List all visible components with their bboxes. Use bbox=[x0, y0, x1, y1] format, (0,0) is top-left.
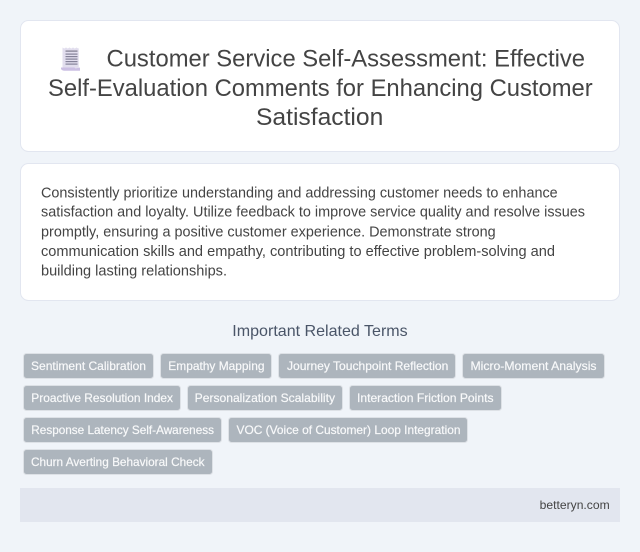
summary text: satisfaction and loyalty. Utilize feedback to improve service quality and resolve issues bbox=[41, 205, 585, 221]
icon: receipt scroll bbox=[61, 48, 80, 71]
tag: Response Latency Self-Awareness: Response Latency Self-Awareness bbox=[31, 423, 214, 437]
tag: Empathy Mapping bbox=[160, 354, 272, 378]
summary text bbox=[41, 185, 585, 279]
tag: Response Latency Self-Awareness bbox=[24, 418, 222, 442]
tag: Micro-Moment Analysis: Micro-Moment Analysis bbox=[470, 359, 596, 373]
tag: Micro-Moment Analysis bbox=[462, 354, 604, 378]
heading: related terms: Important Related Terms bbox=[232, 323, 408, 340]
summary text: communication skills and empathy, contributing to effective problem-solving and bbox=[41, 244, 555, 260]
tag: Proactive Resolution Index: Proactive Resolution Index bbox=[31, 391, 173, 405]
footer bbox=[20, 488, 620, 522]
tag: Churn Averting Behavioral Check bbox=[24, 450, 212, 474]
tag: Empathy Mapping: Empathy Mapping bbox=[168, 359, 264, 373]
title bbox=[48, 46, 593, 131]
tag: Sentiment Calibration bbox=[24, 354, 154, 378]
summary text: promptly, ensuring a positive customer experience. Demonstrate strong bbox=[41, 224, 496, 240]
tag: Proactive Resolution Index bbox=[24, 386, 180, 410]
tag: Journey Touchpoint Reflection bbox=[278, 354, 456, 378]
footer source text: betteryn.com bbox=[540, 498, 610, 512]
tag: VOC (Voice of Customer) Loop Integration: VOC (Voice of Customer) Loop Integration bbox=[236, 423, 460, 437]
summary text: Consistently prioritize understanding and addressing customer needs to enhance bbox=[41, 185, 558, 201]
title: Customer Service Self-Assessment: Effective bbox=[106, 46, 585, 72]
tag: Interaction Friction Points bbox=[350, 386, 502, 410]
tag: Churn Averting Behavioral Check: Churn Averting Behavioral Check bbox=[31, 455, 205, 469]
tag: Sentiment Calibration: Sentiment Calibration bbox=[31, 359, 146, 373]
tag: Interaction Friction Points: Interaction Friction Points bbox=[357, 391, 494, 405]
title: Satisfaction bbox=[256, 104, 383, 131]
tag: VOC (Voice of Customer) Loop Integration bbox=[228, 418, 468, 442]
tag: Personalization Scalability bbox=[188, 386, 342, 410]
panel: summary card bbox=[20, 164, 620, 300]
tag list bbox=[24, 354, 604, 474]
summary text: building lasting relationships. bbox=[41, 263, 227, 279]
tag: Personalization Scalability: Personalization Scalability bbox=[195, 391, 335, 405]
tag: Journey Touchpoint Reflection: Journey Touchpoint Reflection bbox=[287, 359, 448, 373]
panel: title card bbox=[20, 20, 620, 152]
title: Self-Evaluation Comments for Enhancing Customer bbox=[48, 75, 593, 102]
